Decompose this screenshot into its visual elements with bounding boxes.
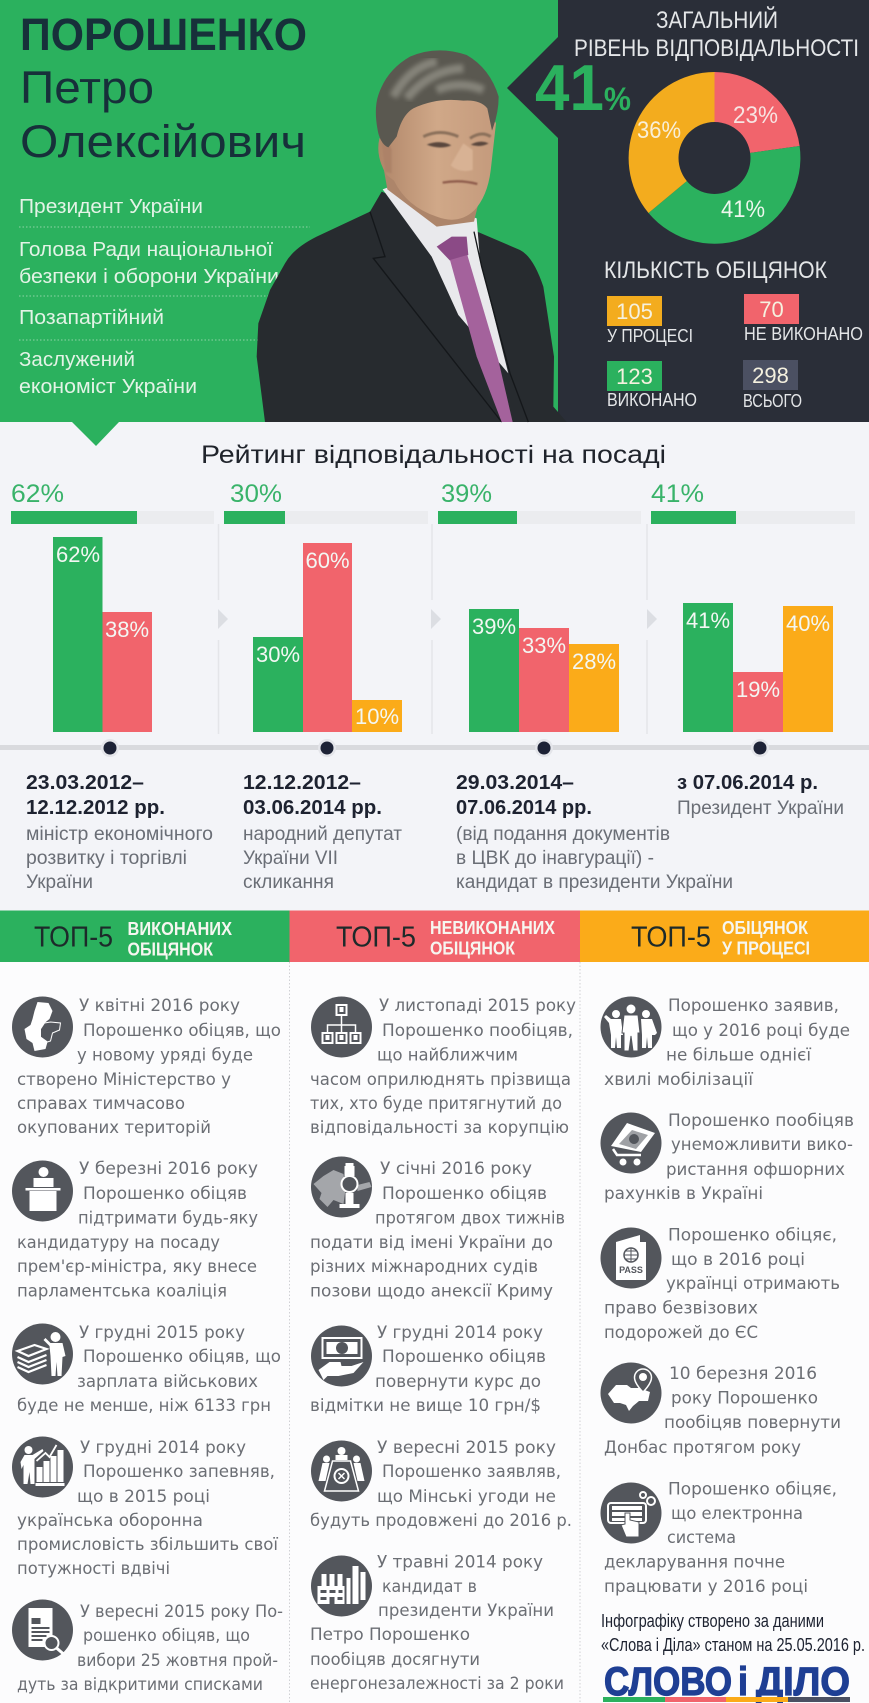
title: name: ПОРОШЕНКО xyxy=(20,9,307,60)
banner: top-5 not done: ОБІЦЯНОК xyxy=(430,938,516,958)
stat: done xyxy=(607,361,697,410)
banner: top-5 done: ВИКОНАНИХ xyxy=(128,919,232,939)
arrow: step 3 xyxy=(647,609,657,629)
icon: banknote and hand xyxy=(311,1326,372,1386)
logo: Slovo i Dilo xyxy=(603,1660,850,1703)
face details xyxy=(382,132,491,184)
text: promise 1: не більше однієї xyxy=(666,1046,811,1064)
icon: passport: PASS xyxy=(619,1265,643,1275)
text: promise 2 xyxy=(604,1111,854,1203)
progress: period 1: 62% xyxy=(11,480,64,508)
text: promise 3: Порошенко обіцяє, xyxy=(668,1226,837,1245)
title: name: Петро xyxy=(20,62,154,113)
stat: not done xyxy=(744,294,863,344)
text: promise 4: українська оборонна xyxy=(17,1511,203,1530)
text: period 2: 12.12.2012– xyxy=(243,772,361,794)
panel: column done xyxy=(12,996,283,1694)
icon: org chart xyxy=(311,996,372,1058)
text: promise 3: відмітки не вище 10 грн/$ xyxy=(310,1396,541,1415)
icon: money and soldier xyxy=(12,1324,73,1384)
icon: passport xyxy=(600,1228,662,1288)
text: promise 4: будуть продовжені до 2016 р. xyxy=(310,1511,572,1530)
icon: document and magnifier xyxy=(12,1600,73,1660)
stat: total xyxy=(743,360,802,411)
title: name: Олексійович xyxy=(20,116,306,167)
text: promise 1 xyxy=(604,996,850,1089)
text: period 3 xyxy=(456,772,733,893)
portrait of Poroshenko xyxy=(257,50,567,422)
banner: top-5 not done xyxy=(290,910,580,962)
text: promise 5 xyxy=(310,1553,564,1693)
text: promise 3: буде не менше, ніж 6133 грн xyxy=(17,1396,271,1415)
logo: Slovo i Dilo: СЛОВО xyxy=(604,1660,732,1703)
text: promise 5: У травні 2014 року xyxy=(377,1553,543,1572)
panel: rating chart xyxy=(0,441,869,893)
text: promise 5: вибори 25 жовтня прой- xyxy=(77,1651,278,1670)
progress: period 1 xyxy=(11,480,214,524)
text: promise 5: що електронна xyxy=(671,1504,803,1523)
text block: positions: Заслужений xyxy=(19,349,135,371)
text: promise 1: Порошенко пообіцяв, xyxy=(382,1021,573,1040)
text: promise 1: У квітні 2016 року xyxy=(79,996,240,1015)
timeline xyxy=(0,739,869,757)
text: promise 1: тих, хто буде притягнутий до xyxy=(310,1094,562,1113)
text: promise 1: Порошенко обіцяв, що xyxy=(83,1021,281,1040)
bars: period 4: 40% xyxy=(786,611,830,636)
text: period 3: кандидат в президенти України xyxy=(456,872,733,893)
text: promise 2: унеможливити вико- xyxy=(671,1135,853,1154)
big number 41%: 41% xyxy=(535,51,631,124)
text: promise 1: що найближчим xyxy=(377,1046,518,1064)
arrow: step 1 xyxy=(218,609,228,629)
progress: period 3 xyxy=(438,480,641,524)
banner: top-5 not done: НЕВИКОНАНИХ xyxy=(430,918,555,938)
icon: keyboard and hand xyxy=(600,1482,662,1544)
text: promise 5: Петро Порошенко xyxy=(310,1625,470,1644)
text: promise 4: промисловість збільшить свої xyxy=(17,1535,278,1554)
text: promise 1 xyxy=(310,996,576,1137)
text block: positions xyxy=(19,196,310,398)
progress: period 4: 41% xyxy=(651,480,704,508)
stat: in progress: 105 xyxy=(616,299,653,324)
text: promise 5: енергонезалежності за 2 роки xyxy=(310,1674,564,1693)
text block: positions: безпеки і оборони України xyxy=(19,266,279,288)
logo: Slovo i Dilo: ДІЛО xyxy=(756,1660,850,1703)
text: promise 3 xyxy=(17,1323,281,1415)
arrow: step 2 xyxy=(431,609,441,629)
text: period 2: народний депутат xyxy=(243,824,402,845)
stat: in progress: У ПРОЦЕСІ xyxy=(607,326,693,346)
progress: period 2: 30% xyxy=(230,480,282,508)
text: promise 2: подати від імені України до xyxy=(310,1233,553,1252)
text: period 2: 03.06.2014 рр. xyxy=(243,797,382,819)
text block: positions: Президент України xyxy=(19,196,203,218)
text: promise 3: що в 2016 році xyxy=(671,1250,805,1269)
panel: overall responsibility xyxy=(507,0,869,422)
text block: positions: Позапартійний xyxy=(19,307,164,329)
banner: top-5 in progress: У ПРОЦЕСІ xyxy=(722,938,810,958)
text: promise 5: рошенко обіцяв, що xyxy=(83,1626,250,1645)
text: promise 4: що Мінські угоди не xyxy=(377,1487,556,1506)
bars: period 3 xyxy=(469,609,619,732)
text: promise 1: у новому уряді буде xyxy=(77,1046,253,1064)
bars: period 1: 62% xyxy=(56,542,100,567)
text: promise 2: Порошенко обіцяв xyxy=(83,1184,247,1203)
stat: not done: 70 xyxy=(759,297,784,322)
text: promise 3: Порошенко обіцяв xyxy=(382,1347,546,1366)
text: promise 2: У березні 2016 року xyxy=(79,1159,258,1178)
bars: period 3: 33% xyxy=(522,633,566,658)
banner: top-5 in progress: ОБІЦЯНОК xyxy=(722,918,809,938)
stat: total: ВСЬОГО xyxy=(743,391,802,411)
text: promise 1: У листопаді 2015 року xyxy=(379,996,576,1015)
text: promise 4: Порошенко заявляв, xyxy=(382,1462,561,1481)
text: promise 4 xyxy=(604,1364,841,1457)
logo: Slovo i Dilo: і xyxy=(738,1660,748,1703)
bars: period 1: 38% xyxy=(105,617,149,642)
text: promise 4: 10 березня 2016 xyxy=(669,1364,817,1383)
icon: region map xyxy=(12,996,73,1058)
bars: period 3: 28% xyxy=(572,649,616,674)
text: period 2: України VII xyxy=(243,848,338,869)
hair xyxy=(376,50,499,147)
stat: in progress xyxy=(607,296,693,346)
banner: top-5 done: ТОП-5 xyxy=(34,922,113,954)
text: promise 3: У грудні 2014 року xyxy=(377,1323,543,1342)
text: period 3: (від подання документів xyxy=(456,824,670,845)
bars: period 4 xyxy=(683,603,833,732)
banner: top-5 not done: ТОП-5 xyxy=(336,922,416,954)
progress: period 2 xyxy=(224,480,428,524)
heading: rating: Рейтинг відповідальності на посаді xyxy=(201,441,666,469)
bars: period 2: 30% xyxy=(256,642,300,667)
text: promise 3: право безвізових xyxy=(604,1298,758,1318)
icon: growth chart xyxy=(12,1436,73,1498)
text: promise 4: що в 2015 році xyxy=(77,1487,210,1506)
footer note xyxy=(601,1611,865,1655)
bars: period 2: 60% xyxy=(305,548,350,573)
text: promise 1: часом оприлюднять прізвища xyxy=(310,1070,571,1089)
bars: period 1 xyxy=(53,537,152,732)
text: promise 2 xyxy=(17,1159,258,1300)
text: period 1: 23.03.2012– xyxy=(26,772,144,794)
text: period 1: 12.12.2012 рр. xyxy=(26,797,165,819)
text block: positions: Голова Ради національної xyxy=(19,239,273,261)
text: promise 2: протягом двох тижнів xyxy=(375,1208,565,1228)
text: promise 1: що у 2016 році буде xyxy=(672,1021,850,1040)
icon: negotiating table xyxy=(311,1440,372,1502)
text: promise 5: У вересні 2015 року По- xyxy=(80,1602,283,1621)
icon: offshore cart xyxy=(600,1112,662,1174)
text: promise 4 xyxy=(310,1438,572,1530)
text: promise 4: потужності вдвічі xyxy=(17,1559,170,1578)
bars: period 4: 41% xyxy=(686,608,730,633)
text: promise 5: пообіцяв досягнути xyxy=(310,1650,480,1669)
text: promise 2: У січні 2016 року xyxy=(380,1159,532,1178)
text: promise 3: зарплата військових xyxy=(77,1372,258,1391)
arrow: pointer below header xyxy=(72,422,119,446)
text: promise 2 xyxy=(310,1159,565,1300)
text: period 3: 29.03.2014– xyxy=(456,772,574,794)
donut chart: 41% xyxy=(721,196,765,223)
icon: soldiers xyxy=(600,996,662,1058)
donut chart xyxy=(629,72,800,244)
bars: period 4: 19% xyxy=(736,677,780,702)
text: promise 1: відповідальності за корупцію xyxy=(310,1118,569,1137)
icon: factory xyxy=(311,1556,372,1616)
text: promise 2: Порошенко пообіцяв xyxy=(668,1111,854,1130)
text: promise 2: кандидатуру на посаду xyxy=(17,1233,220,1252)
progress: period 3: 39% xyxy=(441,480,492,508)
text: period 4: Президент України xyxy=(677,798,844,819)
text: promise 2: парламентська коаліція xyxy=(17,1282,227,1300)
text: period 1: розвитку і торгівлі xyxy=(26,848,187,869)
text block: positions: економіст України xyxy=(19,376,197,398)
text: period 3: в ЦВК до інавгурації) - xyxy=(456,848,654,869)
heading: promise count: КІЛЬКІСТЬ ОБІЦЯНОК xyxy=(604,257,827,284)
banner: top-5 done xyxy=(0,910,290,962)
text: period 1: України xyxy=(26,872,93,893)
text: promise 4: Порошенко запевняв, xyxy=(83,1462,275,1481)
text: promise 5: дуть за відкритими списками xyxy=(17,1675,263,1694)
banner: top-5 in progress xyxy=(580,910,869,962)
text: promise 1: справах тимчасово xyxy=(17,1094,185,1113)
stat: total: 298 xyxy=(752,363,789,388)
heading: overall level xyxy=(574,6,859,62)
text: promise 4: У грудні 2014 року xyxy=(80,1438,246,1457)
text: promise 5 xyxy=(604,1480,837,1596)
text: promise 1 xyxy=(17,996,281,1137)
panel: column in progress xyxy=(600,996,854,1596)
text: promise 2: рахунків в Україні xyxy=(604,1184,763,1203)
icon: official at desk xyxy=(12,1160,73,1222)
text: promise 5 xyxy=(17,1602,283,1694)
text: promise 3: повернути курс до xyxy=(375,1372,541,1391)
text: promise 2: прем'єр-міністра, яку внесе xyxy=(17,1257,257,1276)
text: promise 1: окупованих територій xyxy=(17,1118,211,1137)
text: promise 3: подорожей до ЄС xyxy=(604,1323,758,1342)
text: period 2: скликання xyxy=(243,872,334,893)
text: promise 3 xyxy=(310,1323,546,1415)
text: promise 1: Порошенко заявив, xyxy=(668,996,839,1015)
text: promise 3: українці отримають xyxy=(666,1274,840,1293)
banner: top-5 in progress: ТОП-5 xyxy=(631,922,711,954)
text: period 1 xyxy=(26,772,213,893)
title: name xyxy=(20,9,307,167)
text: promise 2: ристання офшорних xyxy=(666,1160,845,1179)
text: promise 2: позови щодо анексії Криму xyxy=(310,1282,553,1300)
progress: period 4 xyxy=(651,480,855,524)
text: promise 2: підтримати будь-яку xyxy=(78,1208,258,1228)
donut chart: 36% xyxy=(637,117,681,144)
text: promise 5: працювати у 2016 році xyxy=(604,1577,808,1596)
text: period 4 xyxy=(677,772,844,819)
text: promise 1: створено Міністерство у xyxy=(17,1070,231,1089)
text: promise 5: декларування почне xyxy=(604,1553,785,1572)
text: promise 4 xyxy=(17,1438,278,1578)
text: promise 2: Порошенко обіцяв xyxy=(382,1184,547,1203)
panel: header green xyxy=(0,0,559,422)
bars: period 2: 10% xyxy=(355,704,399,729)
text: promise 3: У грудні 2015 року xyxy=(79,1323,245,1342)
bars: period 3: 39% xyxy=(472,614,516,639)
text: promise 5: президенти України xyxy=(378,1601,554,1620)
heading: overall level: ЗАГАЛЬНИЙ xyxy=(656,6,778,34)
banner: top-5 done: ОБІЦЯНОК xyxy=(128,940,214,960)
text: promise 4: пообіцяв повернути xyxy=(664,1413,841,1432)
text: period 4: з 07.06.2014 р. xyxy=(677,772,818,794)
stat: done: 123 xyxy=(616,364,653,389)
text: promise 4: Донбас протягом року xyxy=(604,1438,801,1457)
text: promise 4: року Порошенко xyxy=(671,1389,818,1408)
text: promise 5: система xyxy=(667,1528,736,1547)
text: promise 5: кандидат в xyxy=(382,1577,477,1596)
donut chart: 23% xyxy=(733,102,778,129)
icon: Ukraine map with pin xyxy=(600,1362,662,1424)
panel: column not done xyxy=(310,996,576,1693)
text: period 2 xyxy=(243,772,402,893)
text: promise 3 xyxy=(604,1226,840,1342)
footer note: Інфографіку створено за даними xyxy=(601,1611,824,1631)
text: promise 5: Порошенко обіцяє, xyxy=(668,1480,837,1499)
text: promise 4: У вересні 2015 року xyxy=(377,1438,556,1457)
text: period 1: міністр економічного xyxy=(26,824,213,845)
bars: period 2 xyxy=(253,543,402,732)
icon: Crimea map and court xyxy=(311,1156,372,1218)
text: promise 2: різних міжнародних судів xyxy=(310,1257,538,1276)
text: promise 3: Порошенко обіцяв, що xyxy=(83,1347,281,1366)
text: promise 1: хвилі мобілізації xyxy=(604,1070,753,1089)
stat: done: ВИКОНАНО xyxy=(607,390,697,410)
text: period 3: 07.06.2014 рр. xyxy=(456,797,592,819)
